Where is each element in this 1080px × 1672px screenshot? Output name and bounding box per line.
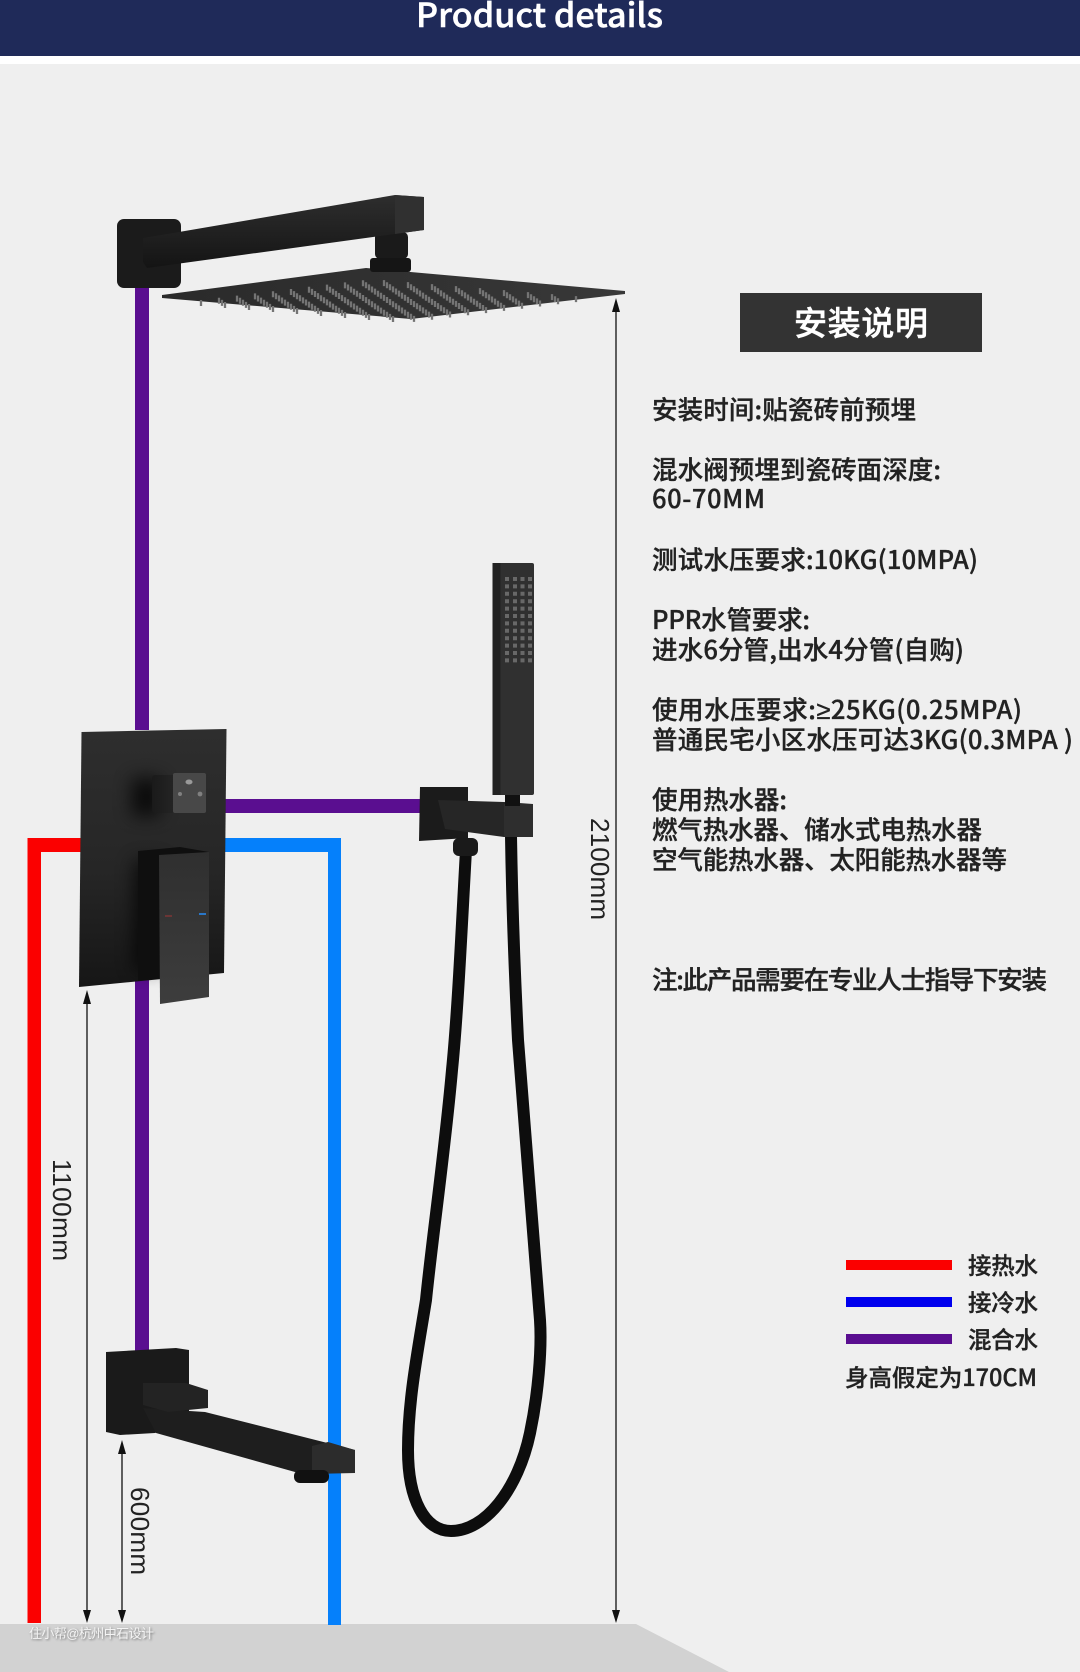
spout arm bbox=[143, 1408, 355, 1473]
spray nozzles bbox=[505, 579, 532, 660]
legend: mixed water: 混合水 bbox=[968, 1321, 1038, 1355]
water heaters: 空气能热水器、太阳能热水器等 bbox=[652, 840, 1007, 877]
pipe: mixed water to tub spout bbox=[135, 975, 149, 1355]
shadow of controls bbox=[132, 778, 160, 816]
dimension: 1100mm: 1100mm bbox=[47, 1159, 77, 1261]
shower arm bbox=[143, 195, 424, 268]
hose swivel connector bbox=[453, 838, 478, 856]
legend: hot water bbox=[846, 1247, 1038, 1281]
embed depth: 60-70MM bbox=[652, 479, 765, 516]
pipe: cold water bbox=[222, 838, 341, 1625]
PPR pipe requirement bbox=[652, 600, 964, 667]
spout end face bbox=[312, 1442, 355, 1474]
pipe: mixed water to shower head bbox=[135, 285, 149, 730]
pipe: hot water bbox=[28, 838, 82, 1623]
legend: cold water: 接冷水 bbox=[968, 1284, 1038, 1318]
PPR pipe requirement: 进水6分管,出水4分管(自购) bbox=[652, 630, 964, 667]
PPR pipe requirement: PPR水管要求: bbox=[652, 600, 810, 637]
test pressure: 测试水压要求:10KG(10MPA) bbox=[652, 540, 978, 577]
legend bbox=[845, 1247, 1038, 1393]
mixer lever bbox=[138, 847, 209, 1004]
handheld shower bbox=[492, 563, 534, 795]
working pressure bbox=[652, 690, 1073, 757]
shower hose bbox=[408, 836, 541, 1531]
dimension: 2100mm: 2100mm bbox=[585, 818, 615, 920]
spout collar bbox=[143, 1383, 208, 1412]
panel: installation instructions bbox=[652, 293, 1073, 997]
instructions badge bbox=[740, 293, 982, 352]
legend: hot water: 接热水 bbox=[968, 1247, 1038, 1281]
water heaters bbox=[652, 780, 1007, 877]
working pressure: 普通民宅小区水压可达3KG(0.3MPA ) bbox=[652, 720, 1073, 757]
pipe: mixed water to hand shower bbox=[220, 799, 425, 813]
working pressure: 使用水压要求:≥25KG(0.25MPA) bbox=[652, 690, 1022, 727]
mixer valve bbox=[79, 729, 226, 1004]
water heaters: 使用热水器: bbox=[652, 780, 787, 817]
legend: mixed water bbox=[846, 1321, 1038, 1355]
rain shower head plate bbox=[162, 268, 625, 322]
embed depth bbox=[652, 450, 941, 516]
legend: cold water bbox=[846, 1284, 1038, 1318]
dimension: 600mm bbox=[118, 1440, 155, 1623]
embed depth: 混水阀预埋到瓷砖面深度: bbox=[652, 450, 941, 487]
dimension: 2100mm bbox=[585, 298, 620, 1623]
height assumption: 身高假定为170CM bbox=[845, 1359, 1037, 1393]
valve plate bbox=[79, 729, 226, 987]
holder wall plate bbox=[419, 787, 468, 841]
spout aerator bbox=[294, 1470, 329, 1483]
shower arm neck bbox=[370, 232, 411, 272]
dimension: 1100mm bbox=[47, 990, 91, 1623]
installation time: 安装时间:贴瓷砖前预埋 bbox=[652, 390, 916, 427]
note: 注:此产品需要在专业人士指导下安装 bbox=[652, 960, 1047, 997]
hand shower set bbox=[408, 563, 541, 1531]
wall plate bbox=[117, 219, 181, 288]
spout wall plate bbox=[106, 1348, 189, 1435]
holder bracket bbox=[438, 794, 533, 837]
watermark: 住小帮@杭州中石设计 bbox=[29, 1626, 154, 1641]
floor bbox=[0, 1624, 729, 1672]
dimension: 600mm: 600mm bbox=[125, 1487, 155, 1575]
shower head assembly bbox=[117, 195, 625, 322]
water heaters: 燃气热水器、储水式电热水器 bbox=[652, 810, 982, 847]
tub spout bbox=[106, 1348, 355, 1483]
diverter knob bbox=[152, 773, 206, 813]
pipes bbox=[28, 285, 425, 1625]
header bar bbox=[0, 0, 1080, 56]
instructions badge: 安装说明 bbox=[794, 297, 928, 345]
